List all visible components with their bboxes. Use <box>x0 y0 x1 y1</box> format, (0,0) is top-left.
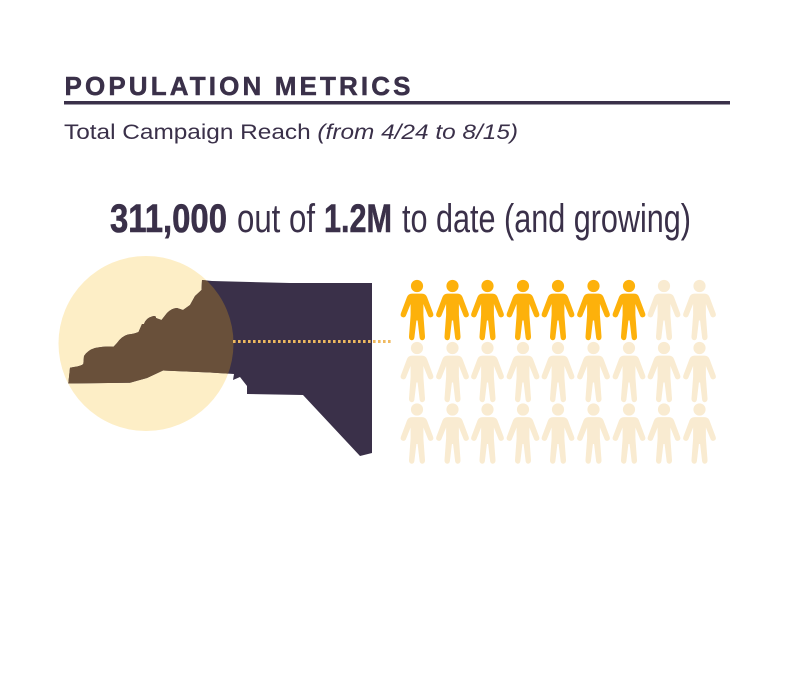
row 2 <box>401 342 716 402</box>
headline <box>110 197 691 241</box>
row 3 <box>401 403 716 464</box>
subtitle: Total Campaign Reach (from 4/24 to 8/15) <box>64 121 518 144</box>
highlight circle <box>58 256 234 431</box>
map: state with highlighted region <box>58 256 372 456</box>
highlighted region of state <box>68 280 234 384</box>
headline: to date (and growing) <box>402 197 691 241</box>
dotted connector <box>233 340 393 343</box>
title rule <box>64 101 730 104</box>
infographic canvas <box>58 76 730 464</box>
pictogram: people, 7 of 27 highlighted <box>401 280 716 464</box>
row 1 <box>401 280 716 340</box>
state shape <box>68 280 372 456</box>
headline: 311,000 <box>110 197 227 241</box>
headline: out of <box>237 197 316 241</box>
title: POPULATION METRICS <box>64 71 410 101</box>
headline: 1.2M <box>324 197 392 241</box>
